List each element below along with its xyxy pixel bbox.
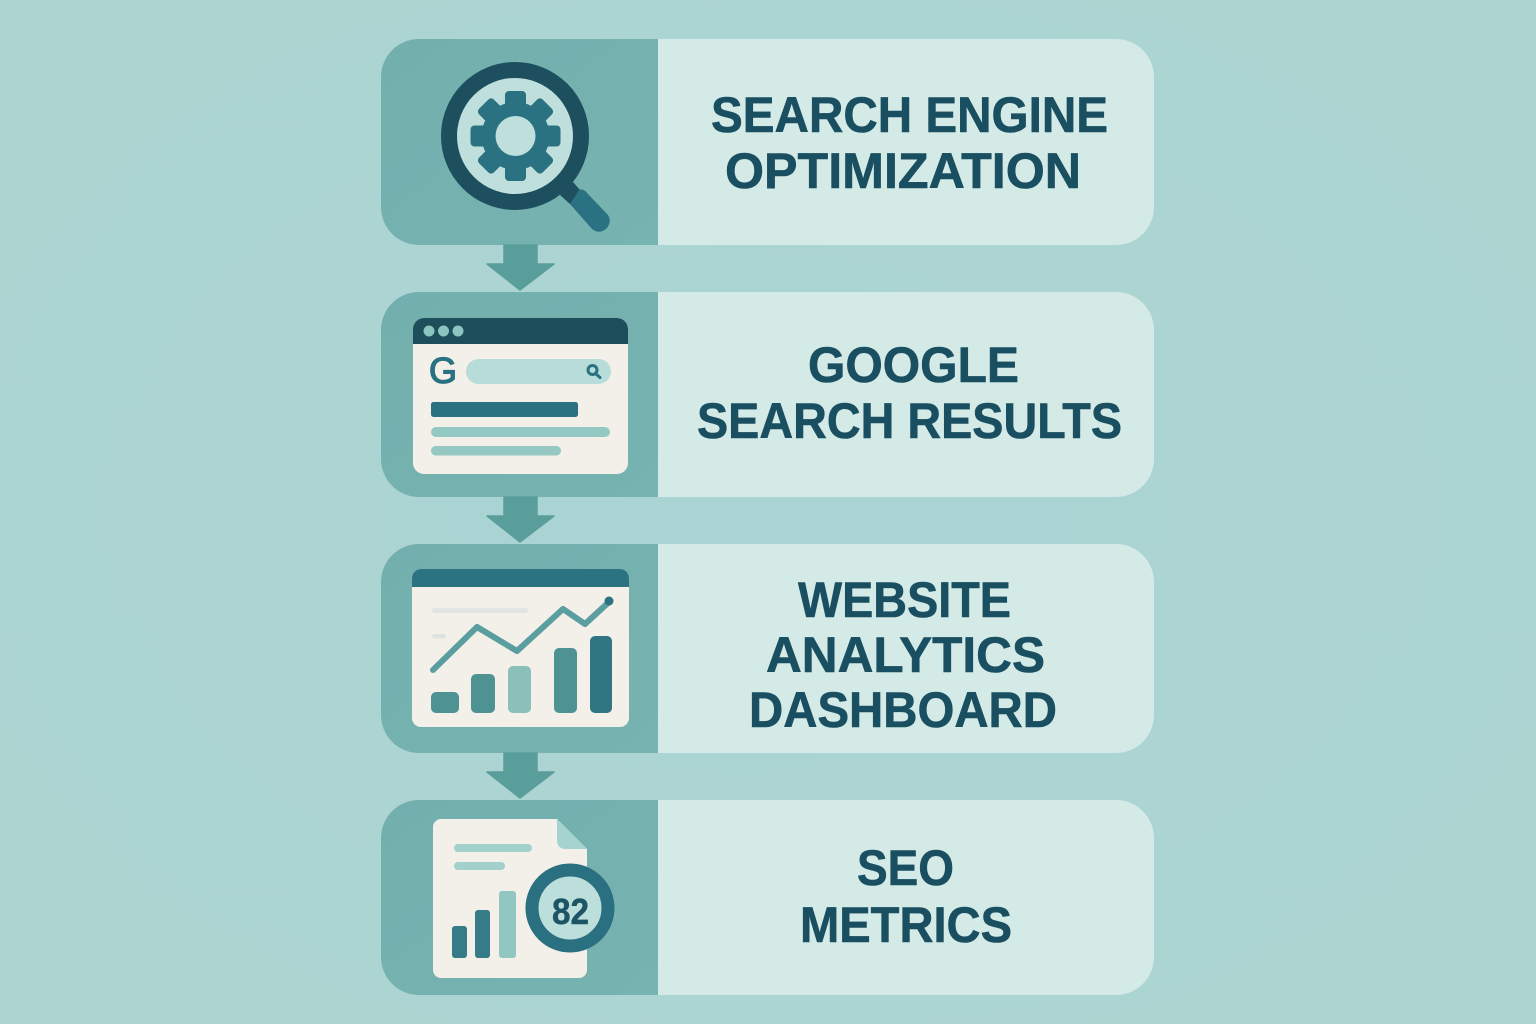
label panel background bbox=[658, 292, 1154, 497]
icon panel background bbox=[381, 544, 658, 753]
icon: magnifying glass with gear bbox=[449, 70, 610, 232]
arrow: step 2 to step 3 bbox=[487, 497, 554, 542]
heading: google search results bbox=[697, 337, 1122, 449]
icon: browser search window bbox=[413, 318, 628, 474]
icon panel background bbox=[381, 800, 658, 995]
panel: seo metrics bbox=[381, 800, 1154, 995]
score badge bbox=[532, 870, 608, 946]
icon: analytics dashboard window bbox=[412, 569, 629, 727]
label panel background bbox=[658, 544, 1154, 753]
score badge: 82 bbox=[552, 891, 589, 932]
panel: google search results bbox=[381, 292, 1154, 497]
heading: seo metrics: METRICS bbox=[800, 897, 1012, 953]
heading: website analytics dashboard: WEBSITE bbox=[798, 572, 1011, 628]
bar chart bbox=[431, 636, 612, 713]
heading: website analytics dashboard: ANALYTICS bbox=[766, 627, 1045, 683]
arrow: step 3 to step 4 bbox=[487, 753, 554, 798]
icon panel background bbox=[381, 39, 658, 245]
heading: google search results: GOOGLE bbox=[808, 337, 1019, 393]
icon panel background bbox=[381, 292, 658, 497]
panel: website analytics dashboard bbox=[381, 544, 1154, 753]
arrow: step 1 to step 2 bbox=[487, 245, 554, 290]
line chart bbox=[433, 596, 614, 670]
label panel background bbox=[658, 39, 1154, 245]
heading: search engine optimization bbox=[711, 87, 1108, 199]
heading: seo metrics bbox=[800, 840, 1012, 953]
heading: website analytics dashboard: DASHBOARD bbox=[749, 682, 1057, 738]
icon: report document with score bbox=[433, 819, 608, 978]
heading: google search results: SEARCH RESULTS bbox=[697, 393, 1122, 449]
heading: website analytics dashboard bbox=[749, 572, 1057, 738]
heading: seo metrics: SEO bbox=[857, 840, 954, 896]
icon: browser search window: G bbox=[429, 350, 457, 391]
label panel background bbox=[658, 800, 1154, 995]
panel: search engine optimization bbox=[381, 39, 1154, 245]
heading: search engine optimization: SEARCH ENGINE bbox=[711, 87, 1108, 143]
heading: search engine optimization: OPTIMIZATION bbox=[725, 143, 1081, 199]
